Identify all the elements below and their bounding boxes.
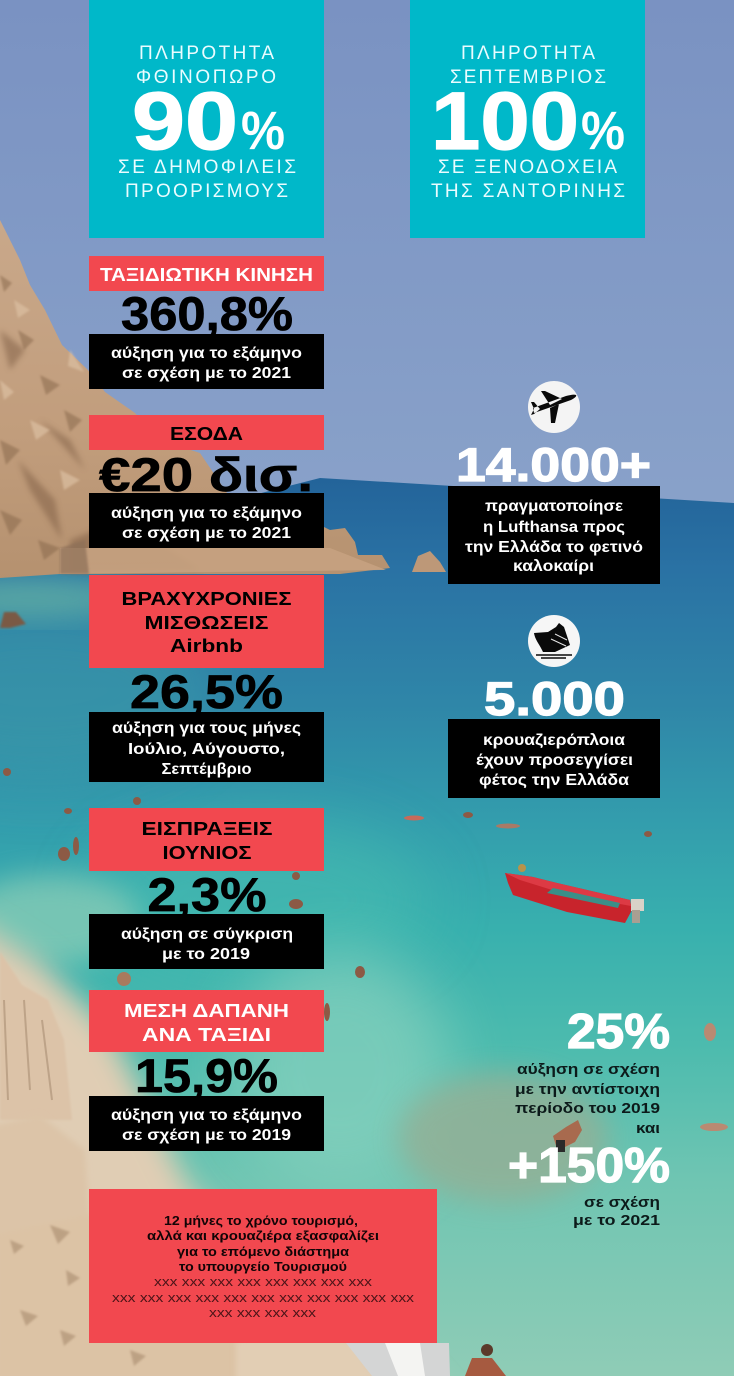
description line 2: έχουν προσεγγίσει — [476, 752, 633, 769]
swimmers — [3, 768, 728, 1152]
description line 2: η Lufthansa προς — [483, 519, 625, 536]
description line 5: σε σχέση — [584, 1194, 660, 1211]
description line 3: φέτος την Ελλάδα — [479, 772, 630, 789]
description line 2: σε σχέση με το 2021 — [122, 365, 291, 382]
description line 6: με το 2021 — [573, 1212, 660, 1229]
percent sign: % — [581, 101, 625, 161]
panel: growth figures — [508, 1005, 670, 1229]
description line 4: καλοκαίρι — [513, 558, 594, 575]
description: αύξηση για το εξάμηνο — [111, 345, 302, 362]
placeholder line 2: xxx xxx xxx xxx xxx xxx xxx xxx xxx xxx xxx — [112, 1291, 415, 1305]
number: 15,9%: 15,9% — [135, 1049, 278, 1102]
description line 3: περίοδο του 2019 — [515, 1100, 660, 1117]
note line 4: το υπουργείο Τουρισμού — [179, 1260, 347, 1274]
panel: travel traffic — [89, 256, 324, 389]
heading line 1: ΜΕΣΗ ΔΑΠΑΝΗ — [124, 1001, 289, 1021]
beach sand — [0, 900, 460, 1376]
label: hotels: ΣΕ ΞΕΝΟΔΟΧΕΙΑ — [438, 157, 617, 178]
panel: Airbnb short-term rentals — [89, 575, 324, 782]
number: 2,3%: 2,3% — [148, 868, 266, 921]
description: κρουαζιερόπλοια — [483, 732, 626, 749]
number: 25%: 25% — [567, 1005, 670, 1059]
label: September: ΣΕΠΤΕΜΒΡΙΟΣ — [450, 67, 606, 88]
panel: occupancy September — [410, 0, 645, 238]
panel: average spend per trip — [89, 990, 324, 1151]
number: 5.000: 5.000 — [484, 672, 625, 725]
heading line 2: ΜΙΣΘΩΣΕΙΣ — [144, 613, 269, 633]
label: occupancy autumn: ΠΛΗΡΟΤΗΤΑ — [139, 43, 274, 64]
heading line 1: ΒΡΑΧΥΧΡΟΝΙΕΣ — [122, 589, 292, 609]
placeholder line 3: xxx xxx xxx xxx — [209, 1306, 317, 1320]
description line 2: με την αντίστοιχη — [515, 1081, 660, 1098]
description: αύξηση για τους μήνες — [112, 720, 301, 737]
description line 1: αύξηση σε σχέση — [517, 1061, 660, 1078]
number: 100: 100 — [431, 76, 579, 167]
panel: occupancy autumn — [89, 0, 324, 238]
number: 90: 90 — [132, 76, 238, 167]
percent sign: % — [241, 101, 285, 161]
panel: note — [89, 1189, 437, 1343]
number: 14.000+: 14.000+ — [456, 438, 651, 491]
heading line 2: ΙΟΥΝΙΟΣ — [162, 843, 252, 863]
label: destinations: ΠΡΟΟΡΙΣΜΟΥΣ — [125, 181, 288, 202]
description line 3: την Ελλάδα το φετινό — [465, 539, 643, 556]
description: αύξηση για το εξάμηνο — [111, 505, 302, 522]
description: πραγματοποίησε — [485, 498, 624, 515]
heading: travel traffic: ΤΑΞΙΔΙΩΤΙΚΗ ΚΙΝΗΣΗ — [100, 265, 313, 285]
label: occupancy September: ΠΛΗΡΟΤΗΤΑ — [461, 43, 595, 64]
heading line 1: ΕΙΣΠΡΑΞΕΙΣ — [142, 819, 273, 839]
panel: Lufthansa flights — [448, 381, 660, 584]
icon: airplane — [528, 381, 580, 433]
heading line 3: Airbnb — [170, 636, 243, 656]
note line 3: για το επόμενο διάστημα — [177, 1245, 349, 1259]
heading line 2: ΑΝΑ ΤΑΞΙΔΙ — [142, 1025, 271, 1045]
panel: cruise ships — [448, 615, 660, 798]
description line 2: σε σχέση με το 2019 — [122, 1127, 291, 1144]
label: Santorini: ΤΗΣ ΣΑΝΤΟΡΙΝΗΣ — [431, 181, 625, 202]
description line 4: και — [636, 1120, 660, 1137]
description: αύξηση σε σύγκριση — [121, 926, 293, 943]
heading: revenue: ΕΣΟΔΑ — [170, 424, 243, 444]
label: autumn: ΦΘΙΝΟΠΩΡΟ — [136, 67, 276, 88]
umbrella — [346, 1343, 450, 1376]
note line 1: 12 μήνες το χρόνο τουρισμό, — [164, 1214, 358, 1228]
red boat — [505, 864, 644, 923]
placeholder line 1: xxx xxx xxx xxx xxx xxx xxx xxx — [154, 1275, 373, 1289]
icon: cruise ship — [528, 615, 580, 667]
label: popular destinations: ΣΕ ΔΗΜΟΦΙΛΕΙΣ — [118, 157, 296, 178]
description line 2: Ιούλιο, Αύγουστο, — [128, 741, 285, 758]
description: αύξηση για το εξάμηνο — [111, 1107, 302, 1124]
number: 26,5%: 26,5% — [130, 665, 283, 718]
number: 360,8%: 360,8% — [121, 287, 293, 340]
description line 3: Σεπτέμβριο — [162, 761, 252, 778]
panel: June receipts — [89, 808, 324, 969]
description line 2: σε σχέση με το 2021 — [122, 525, 291, 542]
panel: revenue — [89, 415, 324, 548]
sunbather — [465, 1344, 506, 1376]
number: 20 billion: €20 δισ. — [99, 448, 313, 501]
number: +150%: +150% — [508, 1139, 670, 1193]
cliff — [0, 220, 446, 578]
description line 2: με το 2019 — [162, 946, 250, 963]
note line 2: αλλά και κρουαζιέρα εξασφαλίζει — [147, 1229, 380, 1243]
